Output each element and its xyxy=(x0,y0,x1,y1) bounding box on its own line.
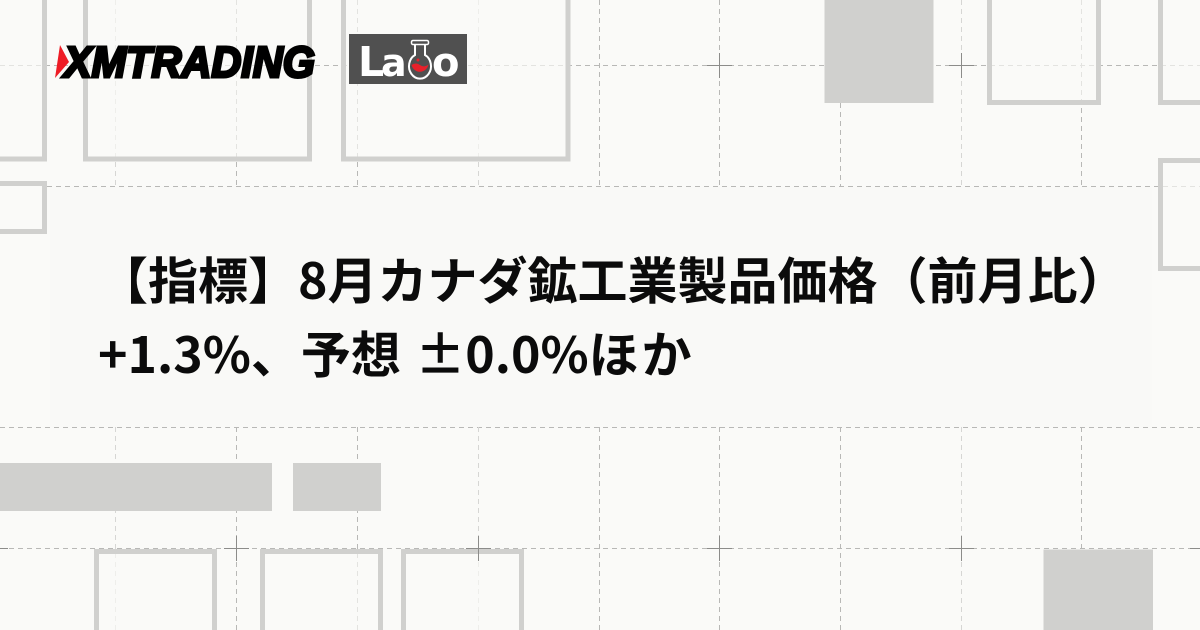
title xyxy=(98,242,1128,388)
logo background xyxy=(349,34,467,84)
center panel xyxy=(50,187,1152,427)
title line 1: 【指標】8月カナダ鉱工業製品価格（前月比） xyxy=(98,242,1128,314)
logo: Lab: o xyxy=(432,40,459,86)
icon: flask xyxy=(409,40,431,79)
logo: Lab: a xyxy=(381,41,407,85)
wordmark: XMTRADING xyxy=(61,38,315,87)
icon: red arrow xyxy=(55,45,69,78)
title line 2: +1.3%、予想 ±0.0%ほか xyxy=(98,316,695,388)
logo letters: L xyxy=(358,38,384,86)
